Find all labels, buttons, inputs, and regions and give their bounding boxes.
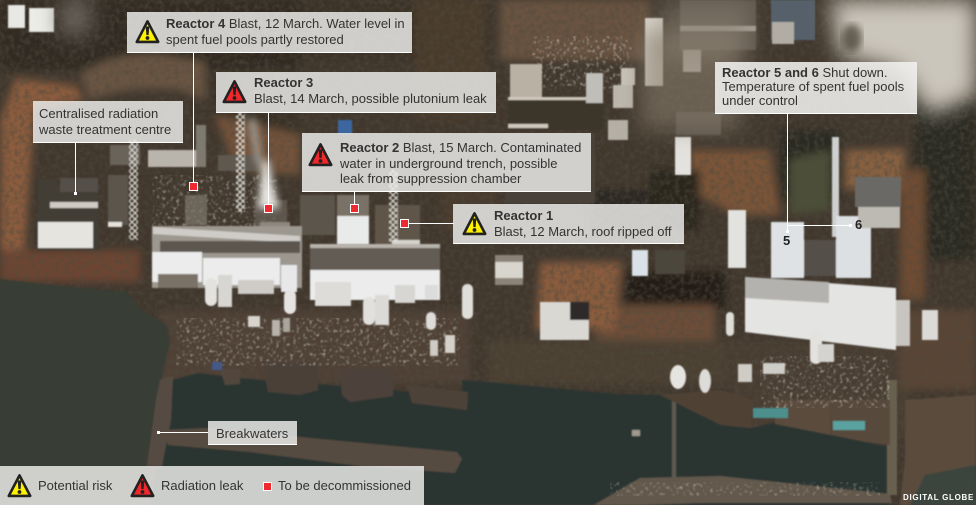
main turbine halls (152, 226, 302, 288)
credit: digital globe: DIGITAL GLOBE (903, 493, 974, 502)
text: reactor 2: water in underground trench, possible (340, 156, 558, 171)
rubble / shore clutter speckle (176, 318, 460, 366)
callout: reactors 5 and 6: Reactor 5 and 6 Shut down. (722, 65, 887, 80)
legend (0, 466, 424, 505)
callout: reactors 5 and 6: Temperature of spent fuel pools (722, 79, 904, 94)
text: reactor 4 (166, 16, 405, 47)
legend label: to be decommissioned: To be decommissioned (278, 478, 411, 493)
cranes / stacks (129, 140, 138, 240)
icon: radiation leak (222, 80, 246, 104)
text: reactor 3: Reactor 3 (254, 75, 313, 90)
mid lower buildings (540, 302, 589, 340)
text: reactor 2 (340, 140, 581, 186)
callout: breakwaters: Breakwaters (216, 426, 288, 441)
legend marker: to be decommissioned (263, 482, 272, 491)
callout: centralised radiation waste treatment centre: Centralised radiation (39, 106, 158, 121)
text: reactor 2: leak from suppression chamber (340, 171, 521, 186)
sea and harbour (0, 279, 976, 505)
text: reactor 2: Reactor 2 Blast, 15 March. Contaminated (340, 140, 581, 155)
forest + dirt (0, 0, 300, 70)
icon: potential risk (136, 20, 160, 44)
label: reactor 5 number: 5 (783, 233, 790, 248)
clouds (60, 0, 976, 130)
icon: radiation leak (308, 143, 332, 166)
reactors 5 and 6 (771, 222, 804, 278)
top-left buildings (8, 5, 25, 28)
text: reactor 1: Blast, 12 March, roof ripped off (494, 224, 672, 239)
callout: centralised radiation waste treatment centre: waste treatment centre (39, 122, 171, 137)
text: reactor 4: spent fuel pools partly restored (166, 32, 344, 47)
icon: potential risk (8, 474, 32, 498)
callout: breakwaters (208, 421, 297, 445)
text: reactor 4: Reactor 4 Blast, 12 March. Water level in (166, 16, 405, 31)
reactor rubble (185, 195, 207, 225)
callout: reactor 4 (127, 12, 412, 53)
icon: potential risk (462, 212, 486, 236)
text: reactor 3: Blast, 14 March, possible plutonium leak (254, 91, 487, 106)
label: reactor 6 number: 6 (855, 217, 862, 232)
legend label: potential risk: Potential risk (38, 478, 112, 493)
centre buildings (510, 64, 542, 98)
text: reactor 3 (254, 75, 487, 106)
shore clutter (248, 316, 260, 327)
piers (220, 369, 240, 385)
callout: reactors 5 and 6: under control (722, 93, 798, 108)
text: reactor 1: Reactor 1 (494, 208, 553, 223)
callout: reactor 1 (453, 204, 684, 244)
icon: radiation leak (130, 474, 154, 498)
legend label: radiation leak: Radiation leak (161, 478, 243, 493)
callout: centralised radiation waste treatment centre (33, 101, 183, 143)
callout: reactor 2 (302, 133, 591, 192)
callout: reactor 3 (216, 72, 496, 113)
smoke (248, 118, 279, 208)
callout: reactors 5 and 6 (715, 62, 917, 114)
text: reactor 1 (494, 208, 672, 239)
